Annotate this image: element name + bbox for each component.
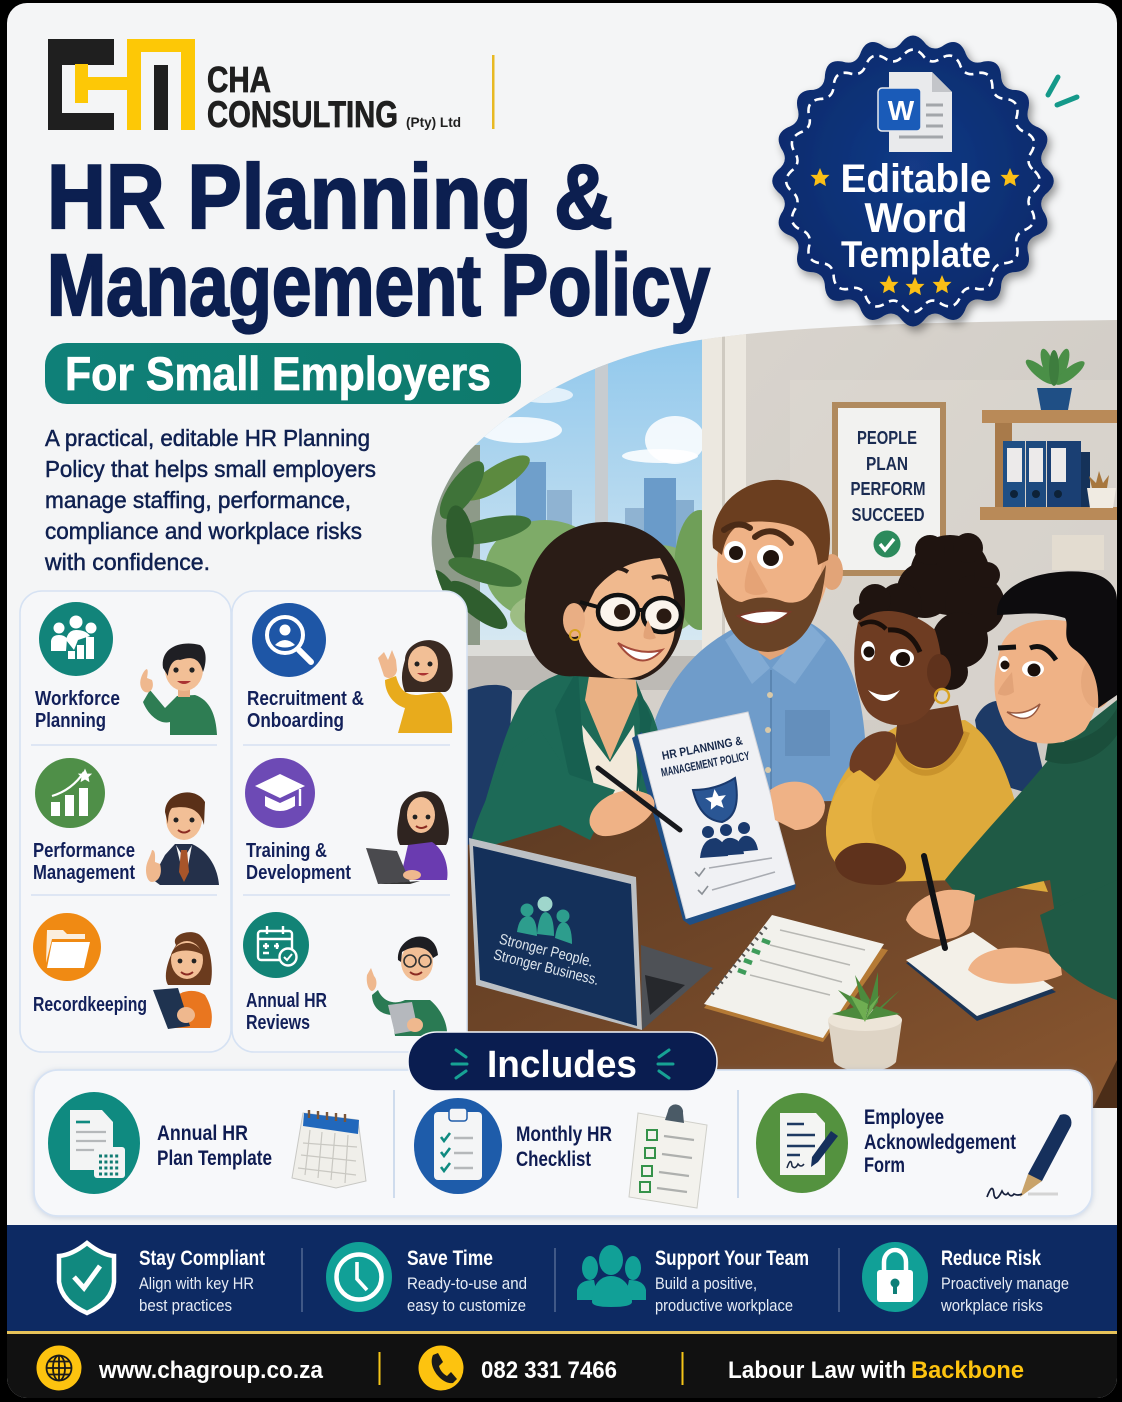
topic: annual hr reviews: Reviews (246, 1012, 310, 1034)
benefits band (7, 1225, 1117, 1331)
title: Management Policy (47, 237, 710, 334)
topic: performance management (33, 758, 219, 885)
topic: recruitment and onboarding (247, 603, 453, 733)
item: employee acknowledgement form: Employee (864, 1106, 944, 1129)
icon: fountain pen with signature (987, 1114, 1071, 1198)
item: employee acknowledgement form: Form (864, 1154, 905, 1177)
tagline: Backbone (911, 1357, 1024, 1384)
topic: workforce planning: Workforce (35, 688, 120, 710)
person: bearded man in blue shirt (655, 480, 865, 802)
benefit: stay compliant: best practices (139, 1296, 232, 1315)
subtitle pill: for small employers: For Small Employers (65, 347, 491, 400)
heading pill: includes (408, 1032, 717, 1091)
poster: people plan perform succeed: PERFORM (850, 479, 926, 499)
intro paragraph: compliance and workplace risks (45, 518, 362, 544)
topic: recruitment and onboarding: Onboarding (247, 710, 344, 732)
chairs (467, 685, 1050, 860)
benefit: reduce risk: Reduce Risk (941, 1247, 1041, 1270)
character: man pointing (140, 644, 217, 735)
topic: workforce planning: Planning (35, 710, 106, 732)
panel: office team illustration (423, 318, 1120, 1113)
tagline: Labour Law with (728, 1357, 906, 1384)
badge: editable word template (772, 35, 1054, 327)
blazer sleeve (472, 774, 615, 844)
plant behind panel (432, 445, 532, 645)
person: young man in green sweater (945, 571, 1117, 1000)
character: man in suit (146, 792, 219, 885)
laptop (469, 838, 713, 1030)
benefit: reduce risk (862, 1242, 1069, 1315)
topic: training and development: Development (246, 862, 351, 884)
topic: recordkeeping (33, 913, 212, 1029)
benefit: stay compliant: Align with key HR (139, 1274, 254, 1293)
badge: editable word template: Template (841, 234, 991, 275)
topic: performance management: Management (33, 862, 135, 884)
benefit: reduce risk: Proactively manage (941, 1274, 1069, 1293)
intro paragraph: manage staffing, performance, (45, 487, 351, 513)
benefit: support your team (577, 1245, 809, 1315)
panel: topics right column (232, 591, 467, 1052)
topic: recordkeeping: Recordkeeping (33, 994, 147, 1016)
topic: annual hr reviews: Annual HR (246, 990, 327, 1012)
heading pill: includes: Includes (487, 1044, 637, 1086)
item: annual hr plan template: Annual HR (157, 1122, 248, 1145)
table (467, 800, 1117, 1108)
character: man with glasses and tablet (367, 936, 447, 1036)
tagline (730, 1360, 1024, 1378)
topic: annual hr reviews (243, 912, 447, 1036)
panel: includes (34, 1070, 1092, 1216)
poster: people plan perform succeed (832, 402, 946, 576)
title: HR Planning & (47, 147, 613, 248)
title (47, 147, 710, 334)
character: woman with tablet (153, 932, 212, 1029)
benefit: save time: Save Time (407, 1247, 493, 1270)
item: employee acknowledgement form (756, 1093, 1071, 1198)
logo: CHA Consulting: CHA (207, 59, 271, 100)
topic: training and development: Training & (246, 840, 327, 862)
benefit: support your team: productive workplace (655, 1296, 793, 1315)
item: monthly hr checklist (414, 1098, 707, 1208)
laptop: Stronger People. (497, 931, 595, 970)
intro paragraph: A practical, editable HR Planning (45, 425, 370, 451)
logo: CHA Consulting (48, 39, 494, 135)
contact footer (7, 1331, 1117, 1399)
benefit: reduce risk: workplace risks (940, 1296, 1043, 1315)
logo: CHA Consulting: (Pty) Ltd (406, 114, 461, 130)
character: woman waving (378, 640, 453, 733)
benefit: support your team: Support Your Team (655, 1247, 809, 1270)
intro paragraph: with confidence. (44, 549, 210, 575)
intro paragraph: Policy that helps small employers (45, 456, 376, 482)
poster: people plan perform succeed: PLAN (866, 454, 908, 474)
item: employee acknowledgement form: Acknowledgement (864, 1131, 1016, 1154)
window with skyline (432, 340, 702, 690)
person: woman with curly hair in yellow sweater (826, 533, 1048, 892)
laptop: Stronger Business. (492, 946, 601, 989)
benefit: save time: easy to customize (407, 1296, 526, 1315)
panel: topics left column (20, 591, 231, 1052)
benefit: save time (326, 1242, 527, 1315)
contact footer: 082 331 7466 (481, 1357, 617, 1384)
topic: recruitment and onboarding: Recruitment & (247, 688, 364, 710)
badge: editable word template: Word (864, 194, 968, 241)
benefit: support your team: Build a positive, (655, 1274, 757, 1293)
benefit: stay compliant: Stay Compliant (139, 1247, 265, 1270)
icon: phone (418, 1346, 464, 1390)
benefit: stay compliant (59, 1243, 265, 1315)
shelf with binders and plants (980, 347, 1119, 570)
policy document: HR PLANNING & (661, 733, 744, 763)
item: annual hr plan template (48, 1092, 366, 1194)
icon: globe (36, 1346, 82, 1390)
icon: word document (878, 72, 952, 152)
topic: performance management: Performance (33, 840, 135, 862)
icon: clipboard checklist (629, 1104, 707, 1208)
item: monthly hr checklist: Monthly HR (516, 1123, 612, 1146)
policy document (632, 712, 796, 925)
character: woman with laptop (366, 791, 449, 884)
topic: workforce planning (35, 602, 217, 735)
icon: desk calendar (292, 1110, 366, 1188)
item: annual hr plan template: Plan Template (157, 1147, 272, 1170)
topic: training and development (245, 758, 449, 884)
person: woman with glasses in green blazer (485, 522, 685, 802)
policy document: MANAGEMENT POLICY (660, 749, 751, 780)
succulent pot (828, 972, 902, 1072)
poster: people plan perform succeed: PEOPLE (857, 428, 917, 448)
logo: CHA Consulting: CONSULTING (207, 94, 398, 135)
accent ticks (1048, 77, 1077, 105)
notepad and writing hand (906, 856, 1117, 1021)
icon: word document: W (888, 95, 915, 126)
item: monthly hr checklist: Checklist (516, 1148, 591, 1171)
intro paragraph (44, 425, 376, 575)
hand and pen (590, 768, 825, 836)
poster: people plan perform succeed: SUCCEED (852, 505, 924, 525)
badge: editable word template: Editable (840, 157, 992, 201)
contact footer: www.chagroup.co.za (98, 1357, 324, 1384)
benefit: save time: Ready-to-use and (407, 1274, 527, 1293)
spiral notebook (704, 915, 888, 1042)
